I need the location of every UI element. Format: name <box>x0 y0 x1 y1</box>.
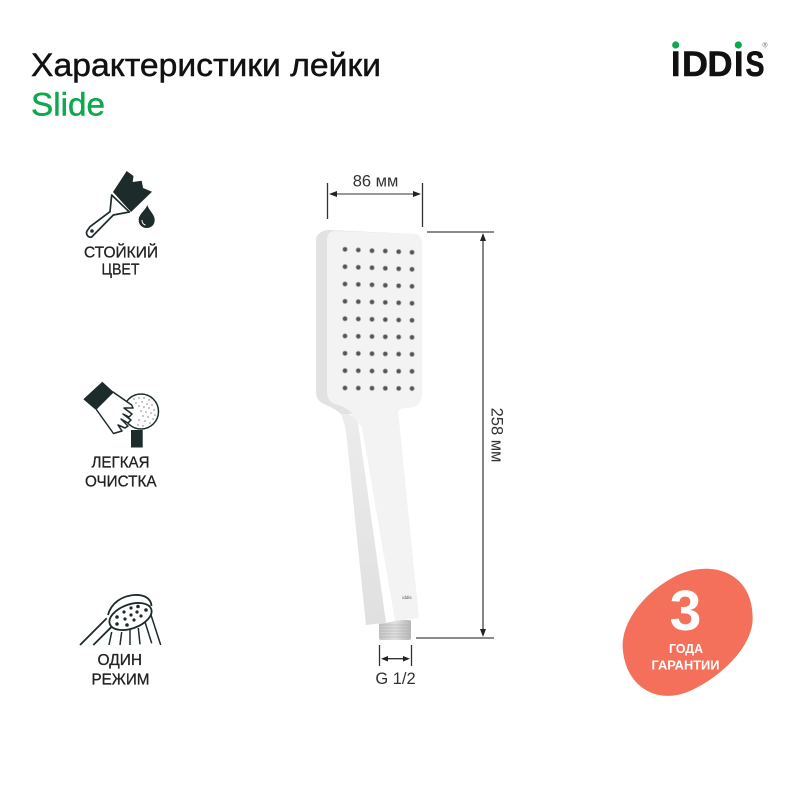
label: стойкий цвет: ЦВЕТ <box>102 262 140 278</box>
label: стойкий цвет: СТОЙКИЙ <box>84 242 158 261</box>
logo: IDDIS: ® <box>762 42 768 50</box>
label: один режим: РЕЖИМ <box>92 671 150 688</box>
dimension: height 258 мм: 258 мм <box>488 408 506 462</box>
warranty badge: ГАРАНТИИ <box>652 658 720 672</box>
logo: IDDIS: D <box>682 45 708 84</box>
handle <box>340 410 419 625</box>
logo: IDDIS: I <box>671 45 680 84</box>
dimension: height 258 мм <box>416 232 506 638</box>
dimension: width 86 мм: 86 мм <box>353 172 398 190</box>
head <box>316 230 422 425</box>
logo: IDDIS: D <box>708 45 732 84</box>
dimension: width 86 мм <box>328 172 422 227</box>
label: один режим: ОДИН <box>98 652 142 669</box>
logo: IDDIS: S <box>746 45 764 84</box>
title: Slide <box>31 86 105 122</box>
label: легкая очистка <box>85 454 157 491</box>
dimension: G 1/2 <box>375 645 416 688</box>
label: стойкий цвет <box>84 242 158 278</box>
title <box>31 47 381 122</box>
title: Характеристики лейки <box>31 47 381 83</box>
logo: IDDIS: I <box>734 45 744 84</box>
label: легкая очистка: ЛЕГКАЯ <box>92 454 150 471</box>
shower head product <box>316 230 422 640</box>
spray holes <box>343 247 414 391</box>
thread <box>379 620 411 640</box>
label: легкая очистка: ОЧИСТКА <box>85 474 157 491</box>
icon: single mode shower <box>80 595 161 645</box>
handle brand mark: iddis <box>402 595 412 600</box>
logo: IDDIS <box>671 41 768 84</box>
warranty badge: ГОДА <box>669 641 704 656</box>
warranty badge: 3 <box>670 579 701 643</box>
icon: easy cleaning <box>83 382 158 448</box>
warranty badge <box>623 569 753 696</box>
dimension: G 1/2: G 1/2 <box>375 670 416 688</box>
icon: paint brush <box>87 171 155 237</box>
label: один режим <box>92 652 150 688</box>
